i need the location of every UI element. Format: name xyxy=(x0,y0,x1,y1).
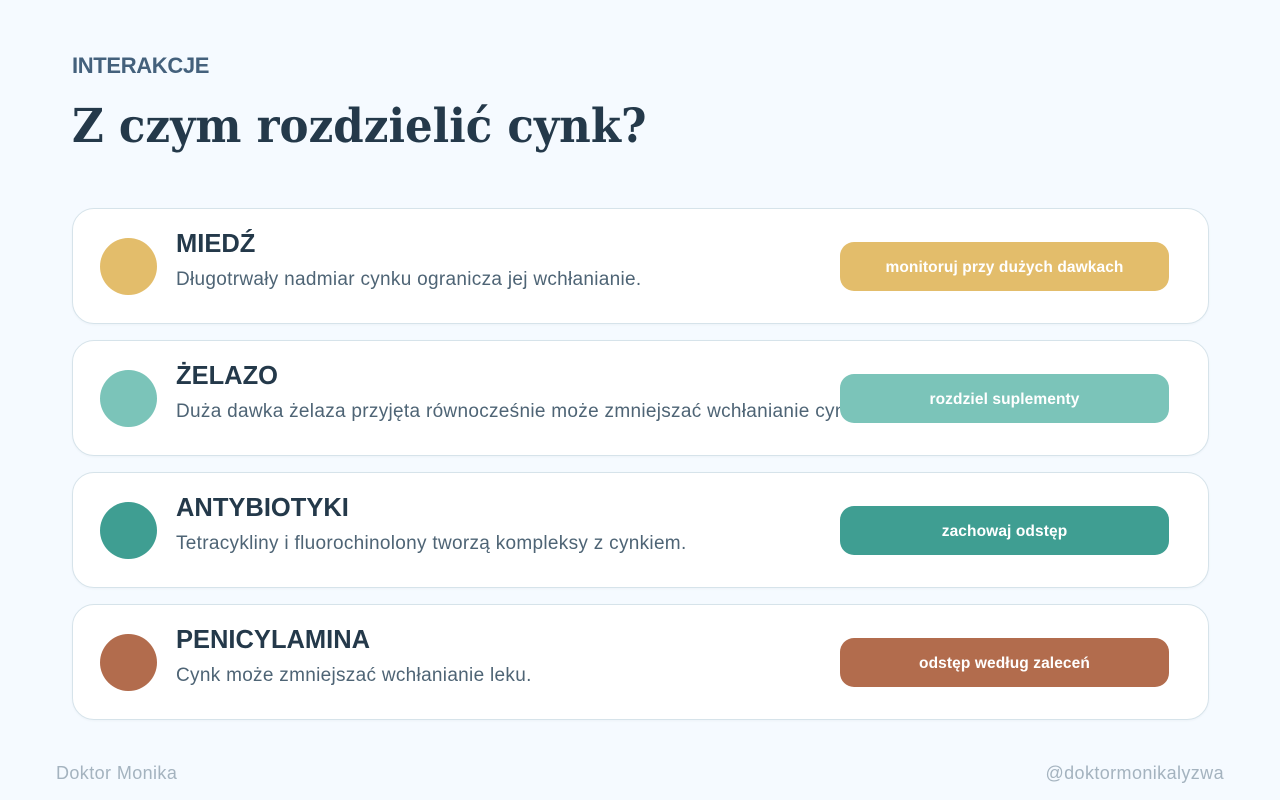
badge: antybiotyki: zachowaj odstęp xyxy=(942,523,1067,540)
icon: miedź dot xyxy=(100,238,157,295)
title: Z czym rozdzielić cynk? xyxy=(72,99,646,154)
text: penicylamina: Cynk może zmniejszać wchłanianie leku. xyxy=(176,665,532,686)
footer: author: Doktor Monika xyxy=(56,763,177,783)
footer: handle: @doktormonikalyzwa xyxy=(1045,763,1224,783)
text: antybiotyki: Tetracykliny i fluorochinolony tworzą kompleksy z cynkiem. xyxy=(176,533,687,554)
badge: żelazo xyxy=(840,374,1169,423)
panel: penicylamina xyxy=(72,604,1209,720)
heading: penicylamina: PENICYLAMINA xyxy=(176,626,370,654)
panel: miedź xyxy=(72,208,1209,324)
panel: żelazo xyxy=(72,340,1209,456)
heading: antybiotyki: ANTYBIOTYKI xyxy=(176,494,349,522)
panel: antybiotyki xyxy=(72,472,1209,588)
badge: miedź xyxy=(840,242,1169,291)
icon: żelazo dot xyxy=(100,370,157,427)
text: miedź: Długotrwały nadmiar cynku ogranicza jej wchłanianie. xyxy=(176,269,642,290)
text: żelazo: Duża dawka żelaza przyjęta równocześnie może zmniejszać wchłanianie cynku. xyxy=(176,401,872,422)
badge: penicylamina xyxy=(840,638,1169,687)
badge: penicylamina: odstęp według zaleceń xyxy=(919,655,1090,672)
eyebrow label: INTERAKCJE xyxy=(72,53,209,78)
badge: miedź: monitoruj przy dużych dawkach xyxy=(885,259,1124,276)
heading: żelazo: ŻELAZO xyxy=(176,362,278,390)
icon: penicylamina dot xyxy=(100,634,157,691)
badge: antybiotyki xyxy=(840,506,1169,555)
icon: antybiotyki dot xyxy=(100,502,157,559)
badge: żelazo: rozdziel suplementy xyxy=(929,391,1080,408)
heading: miedź: MIEDŹ xyxy=(176,230,255,258)
